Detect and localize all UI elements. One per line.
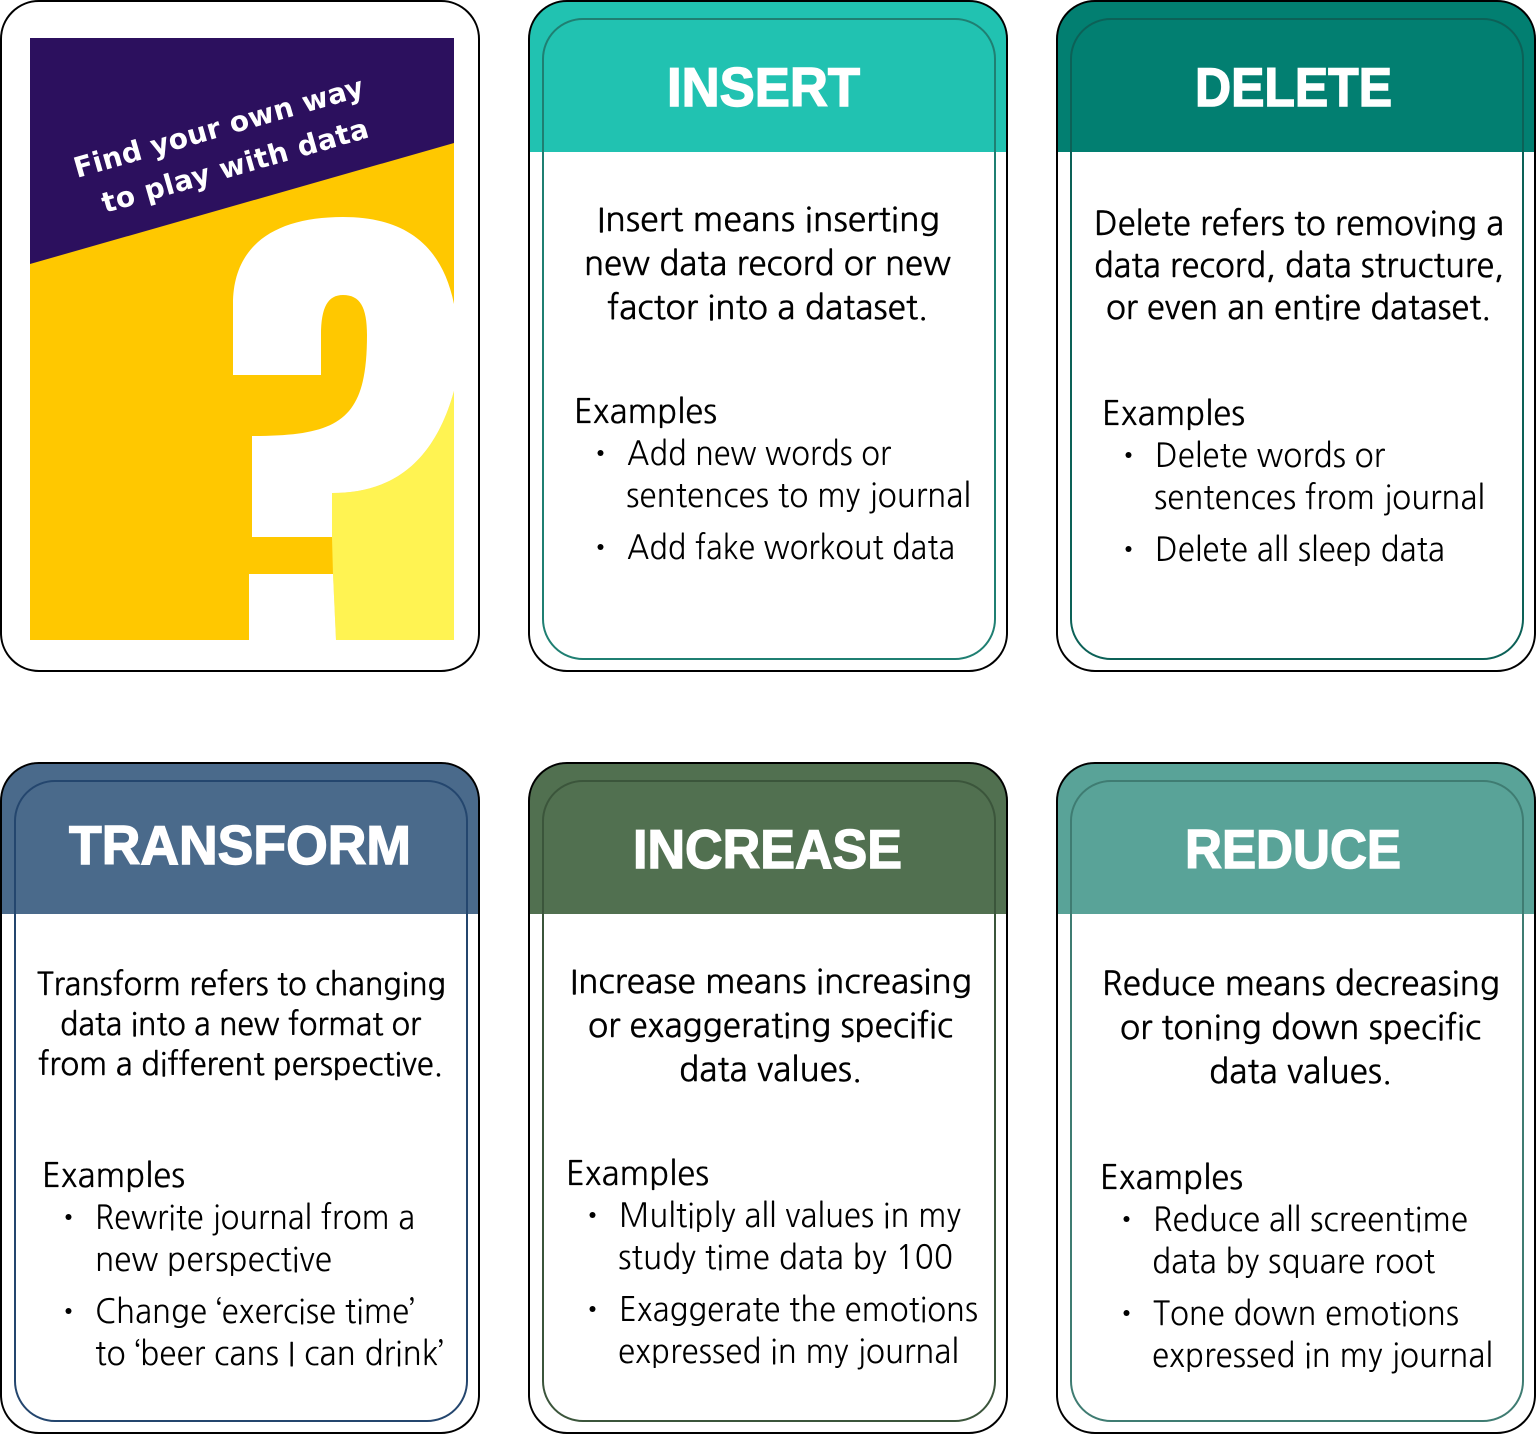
examples: Delete words or xyxy=(1155,439,1385,472)
examples xyxy=(566,1157,978,1369)
definition: Reduce means decreasing xyxy=(1102,967,1500,1000)
definition: or toning down specific xyxy=(1120,1011,1481,1044)
definition: Transform refers to changing xyxy=(37,968,446,1000)
examples: Examples xyxy=(1100,1161,1243,1194)
definition: data values. xyxy=(679,1053,862,1086)
header band xyxy=(529,763,1007,914)
examples xyxy=(1100,1161,1493,1373)
definition: or even an entire dataset. xyxy=(1106,291,1491,324)
examples: expressed in my journal xyxy=(618,1335,959,1369)
definition: Insert means inserting xyxy=(597,203,940,236)
definition: new data record or new xyxy=(584,247,951,280)
examples xyxy=(574,395,971,564)
examples: Examples xyxy=(566,1157,709,1190)
card: insert xyxy=(529,1,1007,671)
examples: to ‘beer cans I can drink’ xyxy=(95,1337,444,1370)
examples: Add fake workout data xyxy=(627,531,955,564)
heading: TRANSFORM xyxy=(69,814,411,876)
examples: Tone down emotions xyxy=(1153,1297,1459,1330)
card: delete xyxy=(1057,1,1535,671)
examples: study time data by 100 xyxy=(618,1241,953,1274)
heading: INSERT xyxy=(667,56,860,118)
header band xyxy=(529,1,1007,152)
examples: data by square root xyxy=(1152,1245,1435,1278)
examples: Reduce all screentime xyxy=(1153,1203,1468,1236)
card: reduce xyxy=(1057,763,1535,1433)
card: transform xyxy=(1,763,479,1433)
examples: Multiply all values in my xyxy=(619,1199,961,1232)
definition: from a different perspective. xyxy=(38,1048,443,1080)
definition xyxy=(570,965,972,1086)
examples: Exaggerate the emotions xyxy=(619,1293,978,1326)
definition: data record, data structure, xyxy=(1094,249,1504,282)
card: increase xyxy=(529,763,1007,1433)
heading: REDUCE xyxy=(1185,818,1401,880)
banner text: to play with data xyxy=(98,112,372,220)
header band xyxy=(1,763,479,914)
definition: Delete refers to removing a xyxy=(1094,207,1504,240)
definition xyxy=(584,203,951,324)
header band xyxy=(1057,763,1535,914)
purple banner xyxy=(30,38,454,264)
examples: Examples xyxy=(1102,397,1245,430)
examples: Rewrite journal from a xyxy=(95,1201,415,1235)
examples: sentences to my journal xyxy=(626,479,971,513)
examples: new perspective xyxy=(95,1243,332,1276)
definition xyxy=(1094,207,1504,324)
icon: question mark xyxy=(233,217,454,640)
examples: Delete all sleep data xyxy=(1155,533,1445,566)
definition xyxy=(37,968,446,1080)
examples: Change ‘exercise time’ xyxy=(95,1295,415,1328)
definition: factor into a dataset. xyxy=(607,291,928,324)
examples: expressed in my journal xyxy=(1152,1339,1493,1373)
heading: INCREASE xyxy=(633,818,902,880)
header band xyxy=(1057,1,1535,152)
card: find your own way xyxy=(1,1,479,671)
heading: DELETE xyxy=(1195,56,1392,118)
examples xyxy=(1102,397,1485,566)
banner text: Find your own way xyxy=(70,70,367,185)
examples: Add new words or xyxy=(627,437,891,470)
examples: sentences from journal xyxy=(1154,481,1485,515)
examples: Examples xyxy=(574,395,717,428)
examples xyxy=(42,1159,444,1370)
definition: data values. xyxy=(1209,1055,1392,1088)
card artwork background xyxy=(30,38,454,640)
definition: Increase means increasing xyxy=(570,965,972,998)
definition: data into a new format or xyxy=(60,1008,422,1040)
examples: Examples xyxy=(42,1159,185,1192)
definition xyxy=(1102,967,1500,1088)
definition: or exaggerating specific xyxy=(588,1009,953,1042)
